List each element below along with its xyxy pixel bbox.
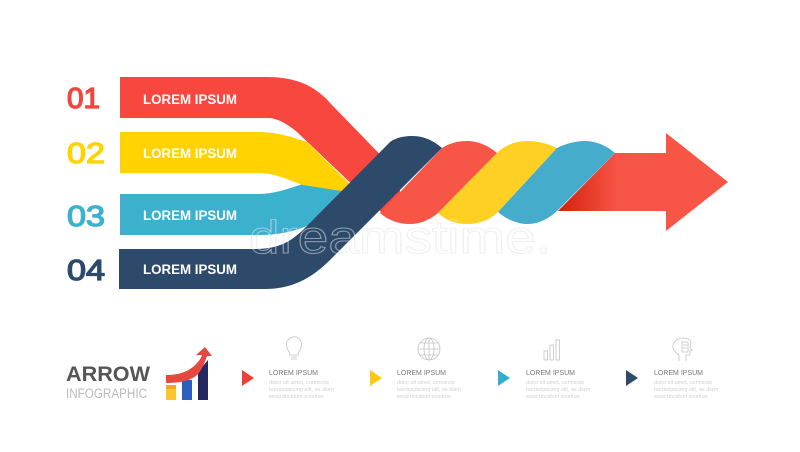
band 02: yellow: [120, 132, 352, 192]
icon: head with chart: [673, 338, 692, 361]
band 03: blue: [120, 180, 345, 235]
watermark: dreamstime.: [249, 211, 551, 263]
step text 1: dolor sit amet, connecte: [269, 380, 329, 386]
step text 4: LOREM IPSUM: [654, 368, 703, 377]
step text 4: [654, 368, 718, 400]
step text 4: dolor sit amet, connecte: [654, 380, 712, 386]
step marker 1: [242, 370, 254, 386]
twist segment: red: [380, 141, 497, 224]
icon: light bulb: [286, 337, 302, 359]
step text 1: tuerasipiscing elit, se diam: [269, 387, 334, 393]
icon: growth chart with arrow: [166, 347, 212, 400]
twist segment: blue: [498, 141, 615, 224]
step text 2: eesd tincidunt ectetuer: [397, 394, 451, 400]
step text 3: eesd tincidunt ectetuer: [526, 394, 580, 400]
icon: globe: [418, 338, 440, 360]
step text 1: eesd tincidunt ectetuer: [269, 394, 324, 400]
footer title: ARROW: [66, 363, 150, 386]
step text 4: eesd tincidunt ectetuer: [654, 394, 708, 400]
step text 4: tuerasipiscing elit, se diam: [654, 387, 718, 393]
step marker 3: [498, 370, 510, 386]
step text 3: LOREM IPSUM: [526, 368, 575, 377]
step text 2: LOREM IPSUM: [397, 368, 446, 377]
arrow head and shaft: [558, 133, 728, 231]
step marker 2: [370, 370, 382, 386]
step text 3: [526, 368, 590, 400]
band label 03: LOREM IPSUM: [143, 208, 237, 223]
number 01: 01: [67, 83, 100, 115]
number 03: 03: [67, 201, 105, 233]
number 04: 04: [67, 255, 105, 287]
step text 1: [269, 368, 334, 400]
footer title: [66, 363, 150, 401]
step text 2: [397, 368, 461, 400]
number 02: 02: [67, 138, 105, 170]
band 04: navy: [119, 136, 442, 289]
band label 04: LOREM IPSUM: [143, 262, 237, 277]
band 01: red: [120, 77, 400, 222]
step text 1: LOREM IPSUM: [269, 368, 318, 377]
step text 2: tuerasipiscing elit, se diam: [397, 387, 461, 393]
footer title: INFOGRAPHIC: [66, 386, 147, 401]
step text 2: dolor sit amet, connecte: [397, 380, 455, 386]
twist segment: yellow: [438, 141, 557, 224]
step text 3: tuerasipiscing elit, se diam: [526, 387, 590, 393]
icon: bar chart: [544, 340, 560, 360]
band label 01: LOREM IPSUM: [143, 92, 237, 107]
step marker 4: [626, 370, 638, 386]
step text 3: dolor sit amet, connecte: [526, 380, 584, 386]
band label 02: LOREM IPSUM: [143, 146, 237, 161]
